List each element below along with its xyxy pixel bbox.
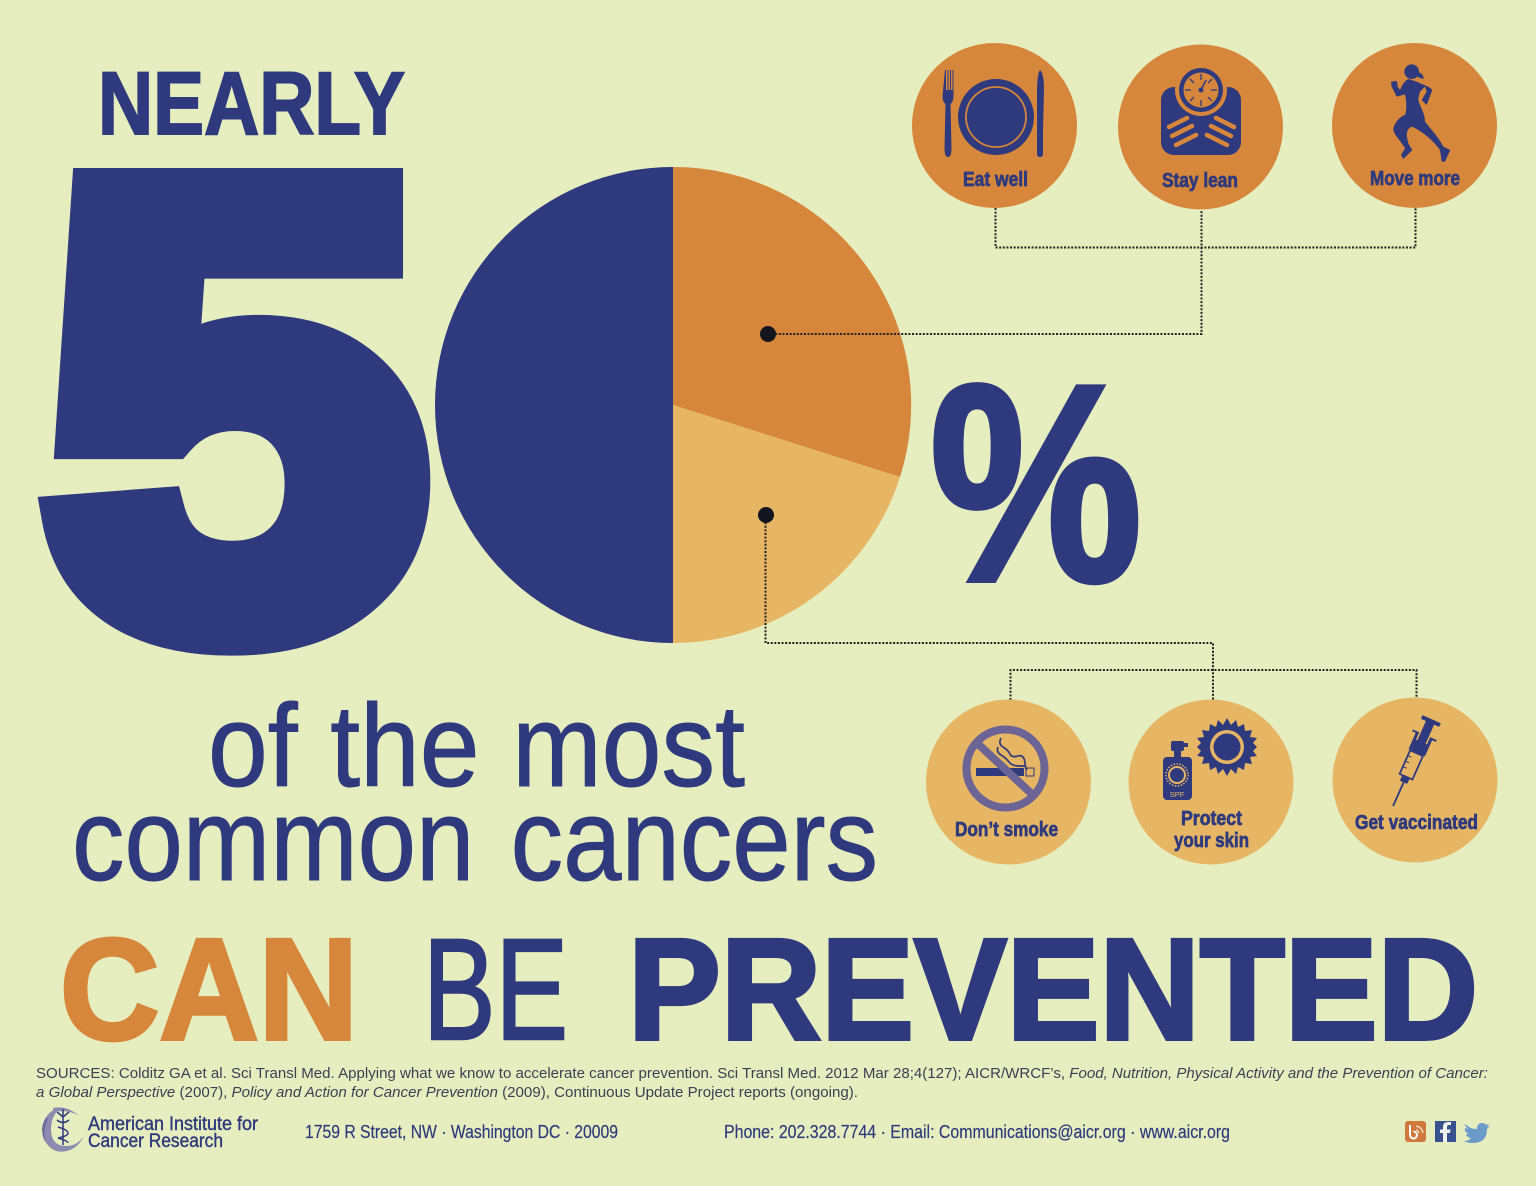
icon: sunscreen bottle (1163, 741, 1192, 800)
icon: sun (1197, 718, 1257, 776)
icon: facebook (1435, 1121, 1456, 1142)
headline: BE: BE (423, 909, 568, 1070)
logo name line 2: Cancer Research (88, 1131, 223, 1152)
heading: NEARLY: NEARLY (98, 53, 405, 153)
sources text: a Global Perspective (2007), Policy and Action for Cancer Prevention (2009), Continuous Update Project reports (ongoing). (36, 1085, 858, 1101)
badge: protect your skin (1128, 700, 1294, 864)
sources text: SOURCES: Colditz GA et al. Sci Transl Med. Applying what we know to accelerate cancer prevention. Sci Transl Med. 2012 Mar 28;4(127); AICR/WRCF’s, Food, Nutrition, Physical Activity and the Prevention of Cancer: (36, 1066, 1488, 1082)
icon: blog rss (1405, 1121, 1426, 1142)
contact details: Phone: 202.328.7744 · Email: Communications@aicr.org · www.aicr.org (724, 1121, 1230, 1142)
pie chart: the zero of 50 (435, 167, 911, 643)
social icons (1405, 1121, 1490, 1143)
giant numeral 5: 5 (46, 54, 424, 762)
connector: bottom group (766, 515, 1416, 700)
badge: eat well (912, 43, 1077, 208)
percent sign: % (930, 328, 1142, 640)
logo mark (42, 1107, 83, 1152)
label: stay lean: Stay lean (1162, 170, 1238, 192)
icon: bathroom scale (1161, 64, 1241, 155)
subheading: of the most: of the most (208, 680, 745, 811)
label: move more: Move more (1370, 168, 1460, 190)
icon: twitter (1464, 1123, 1490, 1143)
headline: CAN: CAN (60, 909, 358, 1070)
label: don't smoke: Don’t smoke (955, 819, 1058, 841)
logo: American Institute for Cancer Research (42, 1107, 259, 1152)
logo name line 1: American Institute for (88, 1114, 259, 1135)
pie slice: diet and lifestyle (673, 167, 911, 477)
subheading: common cancers: common cancers (72, 774, 878, 905)
label: eat well: Eat well (963, 169, 1028, 191)
icon: fork, plate and knife (942, 70, 1044, 157)
marker dot: upper slice (760, 326, 776, 342)
headline: PREVENTED: PREVENTED (628, 909, 1478, 1070)
label: your skin: your skin (1174, 830, 1249, 852)
icon: syringe (1381, 714, 1444, 811)
connector: top group (768, 208, 1416, 334)
sources text (36, 1066, 1488, 1101)
badge: move more (1332, 43, 1497, 208)
icon: runner (1391, 64, 1450, 162)
label: protect: Protect (1181, 808, 1242, 830)
badge: get vaccinated (1332, 698, 1498, 862)
badge: don't smoke (926, 700, 1091, 864)
label: get vaccinated: Get vaccinated (1355, 812, 1478, 834)
pie slice: other prevention (673, 405, 900, 643)
pie slice: non-preventable half (435, 167, 673, 643)
icon: no smoking (966, 730, 1044, 808)
badge: stay lean (1118, 44, 1283, 210)
icon: sunscreen bottle: SPF (1170, 790, 1185, 799)
marker dot: lower slice (758, 507, 774, 523)
address: 1759 R Street, NW · Washington DC · 20009 (305, 1121, 618, 1142)
